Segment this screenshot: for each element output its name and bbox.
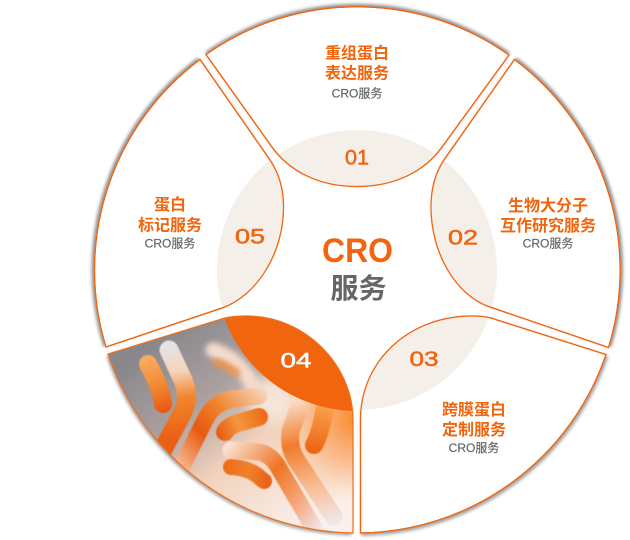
- panel 01: recombinant protein expression: 表达服务: [325, 64, 389, 82]
- panel 02: biomacromolecule interaction research: 生物大分子: [508, 197, 588, 215]
- center title: 服务: [330, 273, 387, 304]
- center title: CRO: [322, 232, 393, 270]
- panel 05: protein labeling: 蛋白: [154, 196, 186, 214]
- panel 02: biomacromolecule interaction research: 02: [448, 226, 478, 250]
- panel 03: membrane protein customization: 定制服务: [442, 420, 506, 439]
- panel 02: biomacromolecule interaction research: 互作研究服务: [500, 216, 596, 235]
- panel 05: protein labeling: [90, 56, 284, 348]
- panel 01: recombinant protein expression: 重组蛋白: [325, 44, 389, 62]
- panel 03: membrane protein customization: CRO服务: [449, 440, 499, 455]
- panel 04: antibody image with orange number segment: 04: [280, 350, 312, 372]
- panel 02: biomacromolecule interaction research: [430, 56, 626, 349]
- panel 04: antibody image with orange number segment: [105, 315, 354, 538]
- center title: [322, 232, 393, 304]
- panel 01: recombinant protein expression: [204, 2, 511, 188]
- panel 01: recombinant protein expression: 01: [345, 146, 369, 170]
- panel 02: biomacromolecule interaction research: CRO服务: [523, 236, 573, 250]
- panel 05: protein labeling: 05: [235, 226, 265, 248]
- panel 01: recombinant protein expression: CRO服务: [332, 86, 382, 100]
- panel 05: protein labeling: 标记服务: [138, 216, 202, 234]
- panel 03: membrane protein customization: 03: [410, 348, 438, 371]
- panel 03: membrane protein customization: 跨膜蛋白: [442, 401, 506, 419]
- panel 05: protein labeling: CRO服务: [145, 236, 195, 250]
- panel 03: membrane protein customization: [359, 315, 610, 538]
